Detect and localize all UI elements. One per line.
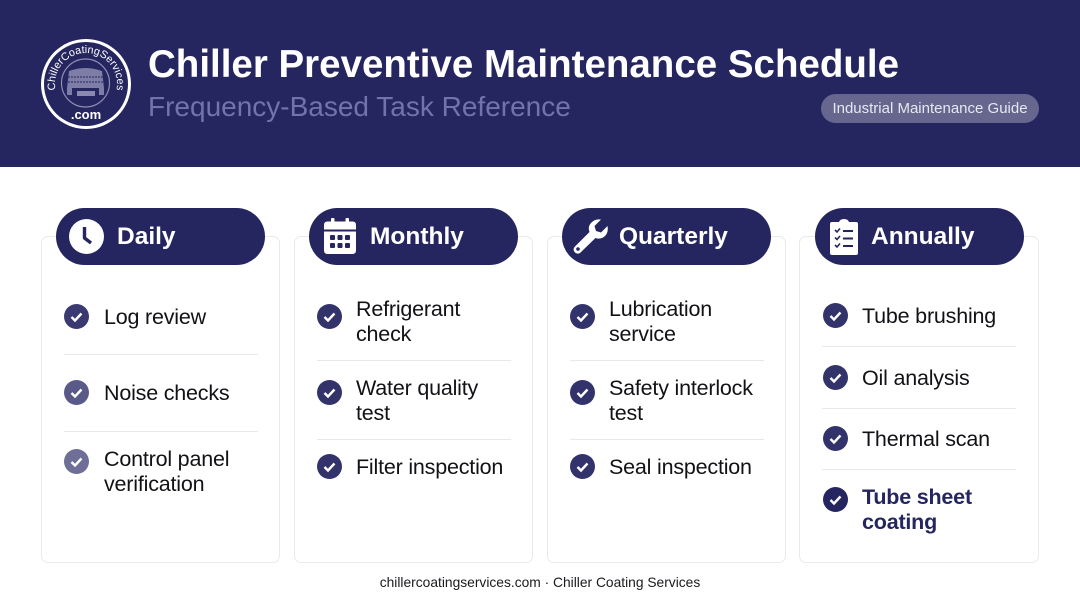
heading: quarterly — [562, 208, 771, 265]
panel: annually card — [799, 236, 1039, 563]
task: Refrigerant — [356, 297, 460, 321]
heading: monthly — [309, 208, 518, 265]
title: Chiller Preventive Maintenance Schedule — [148, 43, 899, 86]
task: highlighted: Tube sheet — [862, 485, 972, 509]
task: test — [356, 401, 390, 425]
icon: check — [823, 487, 848, 512]
task: Filter inspection — [356, 455, 503, 479]
panel: monthly card — [294, 236, 533, 563]
task — [356, 297, 460, 346]
heading: daily: Daily — [117, 223, 176, 250]
logo: .com — [71, 107, 101, 122]
task: Noise checks — [104, 381, 229, 405]
task — [356, 376, 478, 425]
badge — [821, 94, 1039, 123]
task: Control panel — [104, 447, 229, 471]
task — [609, 297, 712, 346]
icon: check — [823, 303, 848, 328]
subtitle: Frequency-Based Task Reference — [148, 91, 571, 122]
icon: check — [64, 380, 89, 405]
task: Water quality — [356, 376, 478, 400]
icon: check — [317, 380, 342, 405]
icon: check — [64, 304, 89, 329]
footer: chillercoatingservices.com · Chiller Coating Services — [380, 575, 700, 590]
task: service — [609, 322, 676, 346]
icon: check — [317, 454, 342, 479]
heading: annually: Annually — [871, 223, 974, 250]
heading: annually — [815, 208, 1024, 265]
logo: ChillerCoatingServices — [47, 45, 123, 90]
icon: check — [823, 365, 848, 390]
column: quarterly tasks — [570, 297, 764, 479]
icon: check — [317, 304, 342, 329]
task: verification — [104, 472, 204, 496]
icon: check — [570, 304, 595, 329]
task: Seal inspection — [609, 455, 752, 479]
task: check — [356, 322, 411, 346]
badge: Industrial Maintenance Guide — [832, 100, 1028, 117]
icon: check — [570, 380, 595, 405]
header band — [0, 0, 1080, 167]
task: Tube brushing — [862, 304, 996, 328]
heading: quarterly: Quarterly — [619, 223, 728, 250]
panel: quarterly card — [547, 236, 786, 563]
icon: check — [823, 426, 848, 451]
task: test — [609, 401, 643, 425]
logo — [41, 39, 131, 129]
icon: check — [64, 449, 89, 474]
task: Safety interlock — [609, 376, 753, 400]
column: daily tasks — [64, 304, 258, 496]
task: Lubrication — [609, 297, 712, 321]
task — [104, 447, 229, 496]
task: Oil analysis — [862, 366, 970, 390]
icon: check — [570, 454, 595, 479]
task — [609, 376, 753, 425]
task: highlighted — [862, 485, 972, 534]
task: Thermal scan — [862, 427, 990, 451]
column: annually tasks — [822, 303, 1016, 534]
task: highlighted: coating — [862, 510, 937, 534]
task: Log review — [104, 305, 206, 329]
panel: daily card — [41, 236, 280, 563]
heading: daily — [56, 208, 265, 265]
column: monthly tasks — [317, 297, 511, 479]
heading: monthly: Monthly — [370, 223, 464, 250]
